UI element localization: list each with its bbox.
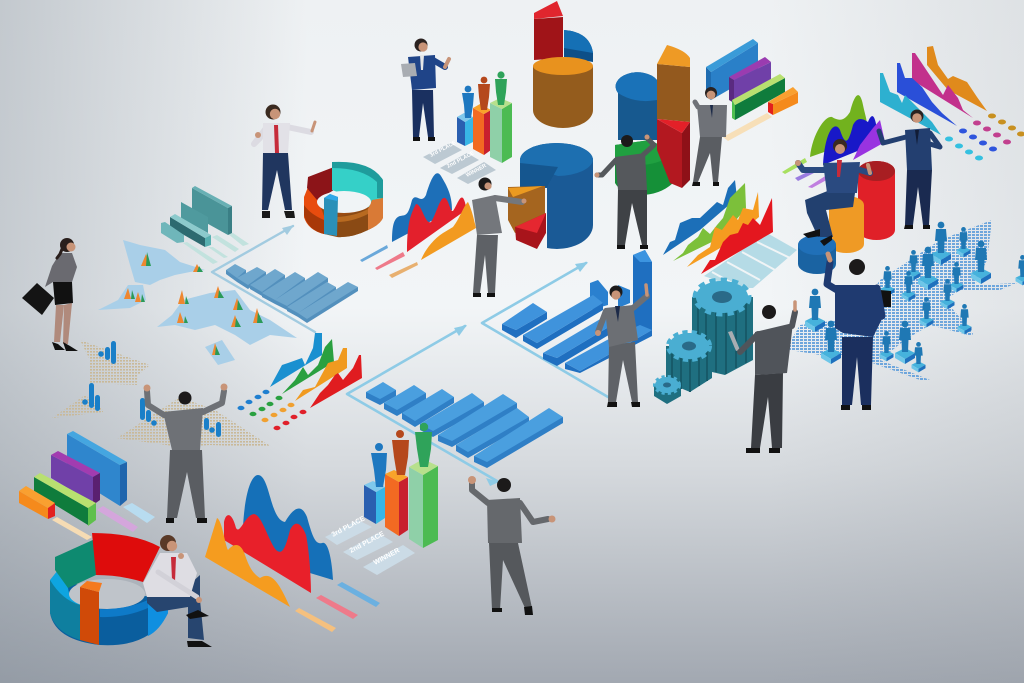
donut chart: upper bbox=[304, 162, 383, 237]
person: navy suit top right bbox=[879, 110, 940, 229]
person: grey suit arms raised from behind bbox=[144, 384, 228, 523]
person: grey suit from behind, arms out bbox=[594, 134, 654, 249]
cylinder seats bbox=[798, 161, 895, 274]
mountain area chart: centre left bbox=[270, 333, 362, 408]
arrow: upper left bars bbox=[212, 225, 315, 332]
dot legend: top right bbox=[945, 114, 1024, 160]
teal block chart bbox=[161, 186, 249, 264]
person: man in white shirt bbox=[254, 104, 315, 218]
person: navy suit with laptop from behind bbox=[827, 254, 891, 410]
podium labels: lower: 3rd PLACE bbox=[331, 515, 367, 539]
person: seated man in white shirt bbox=[143, 535, 212, 647]
gears bbox=[654, 281, 753, 404]
person: woman with briefcase bbox=[22, 238, 78, 351]
person: grey suit pointing at wedge bbox=[472, 178, 526, 297]
dot legend: centre left bbox=[238, 390, 306, 430]
world map: light blue with markers bbox=[98, 240, 297, 365]
podium labels: upper: WINNER bbox=[465, 163, 488, 179]
person: grey suit in front of bar chart bbox=[595, 285, 647, 407]
stacked block chart: lower left bbox=[19, 431, 155, 540]
person: seated man on cylinders bbox=[795, 139, 870, 246]
bar chart: rising blue bars bbox=[502, 250, 652, 373]
cylinder chart: top centre bbox=[533, 1, 593, 128]
podium labels: lower: 2nd PLACE bbox=[349, 531, 386, 555]
arrow: lower centre bbox=[347, 325, 499, 486]
stacked block chart: top right bbox=[706, 39, 798, 141]
podium labels: upper: 3rd PLACE bbox=[429, 140, 458, 159]
dotted maps: lower left with bars bbox=[52, 340, 272, 447]
area chart: lower centre bbox=[205, 475, 380, 632]
bar chart: steel blue descending bars bbox=[226, 264, 358, 323]
podium labels: upper bbox=[423, 140, 496, 184]
mountain area chart: centre right bbox=[663, 180, 797, 290]
person: grey suit standing top right bbox=[692, 87, 727, 186]
person: man in navy with laptop bbox=[401, 38, 449, 141]
podium labels: lower bbox=[325, 515, 415, 575]
podium: lower bbox=[364, 423, 438, 548]
podium: upper bbox=[457, 71, 512, 163]
arrow: upper centre bbox=[482, 262, 608, 397]
person: grey suit from behind, walking bbox=[468, 476, 556, 615]
area chart: upper centre bbox=[360, 173, 476, 278]
donut chart: lower left bbox=[50, 533, 168, 645]
bar chart: descending blue bars bbox=[366, 382, 563, 468]
podium labels: lower: WINNER bbox=[373, 547, 401, 567]
mountain area chart: top right bbox=[880, 46, 987, 135]
cylinder and bar chart: upper right centre bbox=[615, 45, 690, 195]
dotted map: right with people icons bbox=[787, 220, 1024, 380]
area chart: green blue purple bbox=[782, 95, 885, 188]
person: grey suit with tablet from behind bbox=[728, 302, 795, 453]
cylinder chart: centre with pulled wedge bbox=[508, 143, 593, 249]
podium labels: upper: 2nd PLACE bbox=[446, 150, 476, 170]
